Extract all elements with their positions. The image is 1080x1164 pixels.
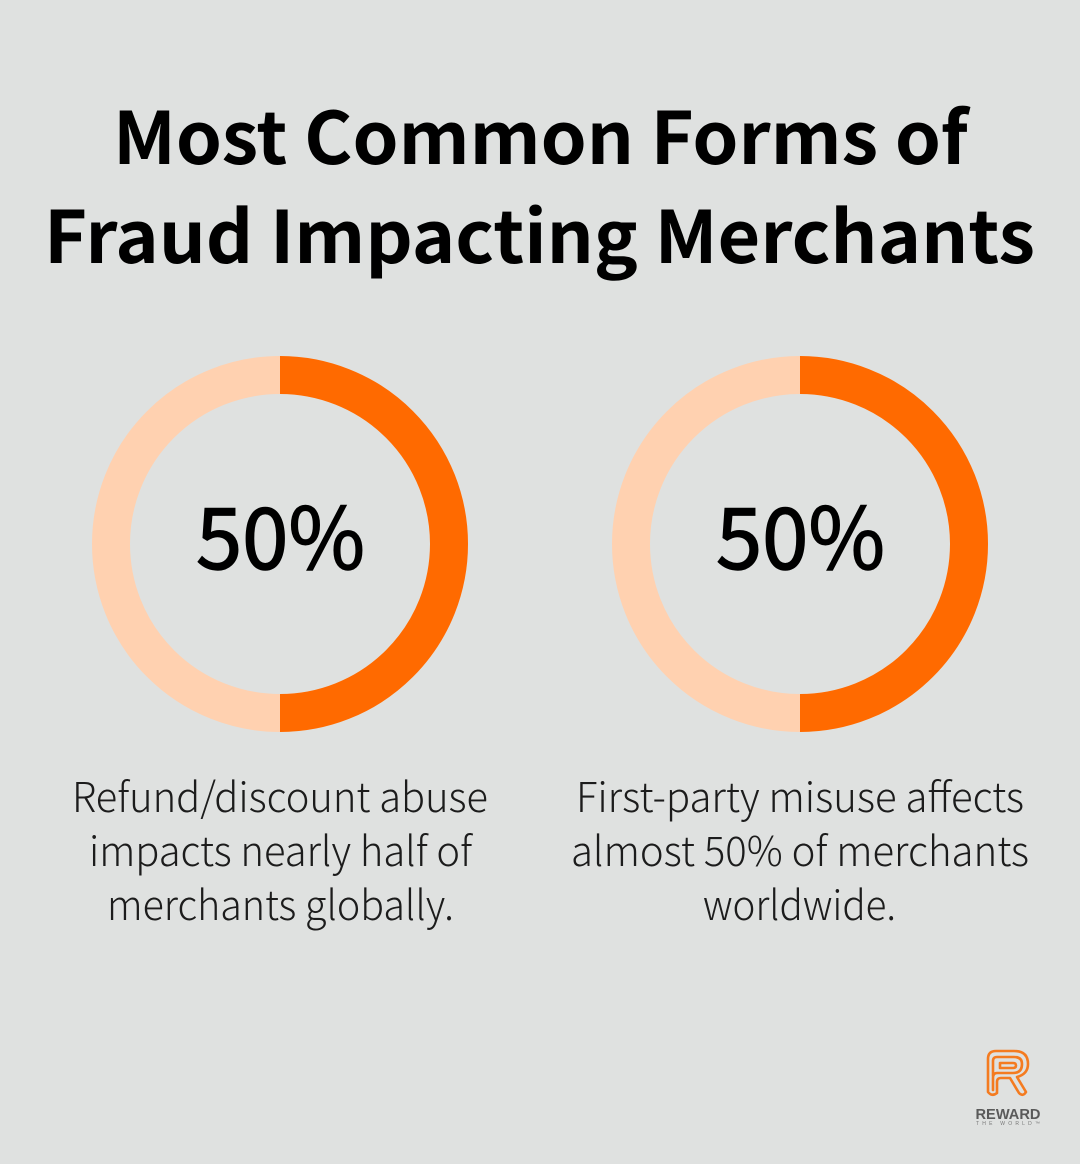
wordmark: REWARD [976, 1107, 1040, 1123]
icon: R mark [988, 1051, 1028, 1095]
title [44, 80, 1035, 284]
logo: Reward the World [976, 1051, 1040, 1127]
title: Fraud Impacting Merchants [44, 179, 1035, 284]
description: refund/discount abuse: merchants globally. [107, 872, 454, 932]
stat: 50% right: 50% [716, 471, 885, 594]
description: refund/discount abuse: Refund/discount abuse [72, 764, 488, 824]
title: Most Common Forms of [113, 80, 971, 185]
description: first-party misuse: First-party misuse affects [576, 764, 1024, 824]
donut chart: 50% right [631, 375, 969, 713]
panel: first-party misuse [571, 375, 1029, 932]
description: refund/discount abuse [72, 764, 488, 932]
description: refund/discount abuse: impacts nearly half of [89, 818, 474, 878]
panel: refund/discount abuse [72, 375, 488, 932]
tagline: THE WORLD™ [976, 1121, 1040, 1127]
stat: 50% left: 50% [196, 471, 365, 594]
donut chart: 50% left [111, 375, 449, 713]
description: first-party misuse [571, 764, 1029, 932]
description: first-party misuse: almost 50% of merchants [571, 818, 1029, 878]
description: first-party misuse: worldwide. [703, 872, 896, 932]
